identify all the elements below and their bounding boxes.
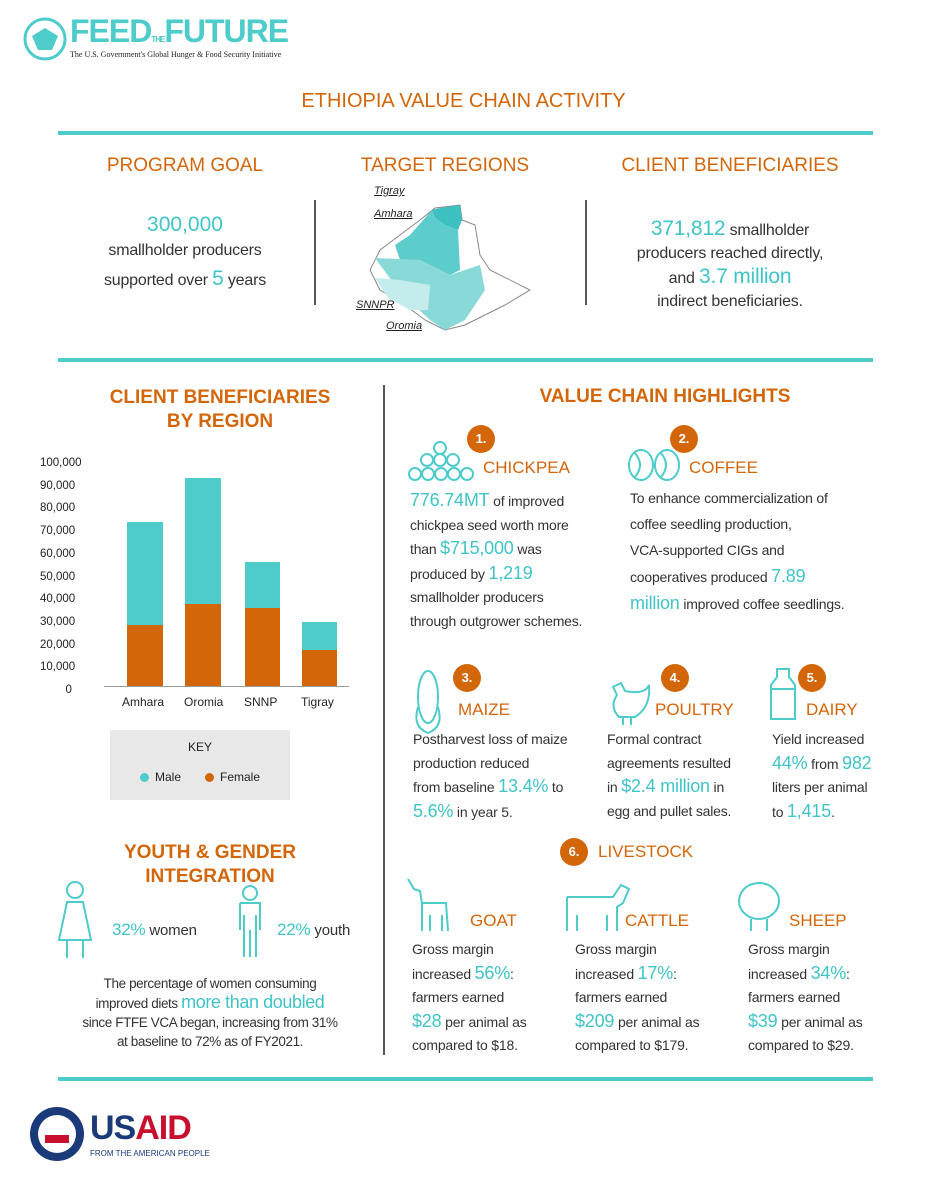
panel: chickpea: 776.74MT of improved	[410, 490, 564, 510]
legend key: Female	[220, 770, 260, 784]
bar chart: Amhara	[122, 695, 164, 709]
panel: goat: compared to $18.	[412, 1037, 518, 1053]
panel: coffee: COFFEE	[689, 458, 758, 477]
text: 22% youth	[277, 920, 350, 939]
panel: goat: farmers earned	[412, 989, 504, 1005]
panel: client beneficiaries: CLIENT BENEFICIARIES	[621, 155, 839, 176]
panel: coffee: 2.	[679, 431, 689, 446]
panel: coffee: VCA-supported CIGs and	[630, 542, 784, 558]
bar chart: SNNP	[244, 695, 277, 709]
legend key: Male	[155, 770, 181, 784]
panel: chickpea: than $715,000 was	[410, 538, 542, 558]
panel: chickpea	[408, 425, 582, 629]
panel: goat: GOAT	[470, 911, 517, 930]
heading: client beneficiaries by region: CLIENT BENEFICIARIES	[110, 387, 330, 408]
bar chart: 90,000	[40, 480, 75, 492]
heading: value chain highlights: VALUE CHAIN HIGHLIGHTS	[540, 386, 790, 407]
panel: poultry: in $2.4 million in	[607, 776, 724, 796]
heading: livestock: LIVESTOCK	[598, 842, 693, 861]
panel: coffee: To enhance commercialization of	[630, 490, 828, 506]
bar chart: Tigray	[301, 695, 334, 709]
bar chart: Oromia	[184, 695, 223, 709]
panel: coffee: million improved coffee seedlings.	[630, 593, 844, 613]
bar chart: 30,000	[40, 616, 75, 628]
bar chart: 50,000	[40, 571, 75, 583]
panel: chickpea: 1.	[476, 431, 486, 446]
heading: youth & gender: YOUTH & GENDER	[124, 842, 296, 863]
legend key	[110, 730, 290, 800]
icon: woman	[58, 881, 92, 958]
panel: cattle: farmers earned	[575, 989, 667, 1005]
panel: goat: Gross margin	[412, 941, 494, 957]
panel: goat: increased 56%:	[412, 962, 514, 982]
logo: feed the future: The U.S. Government's Global Hunger & Food Security Initiative	[70, 50, 281, 59]
text: diets: since FTFE VCA began, increasing from 31%	[82, 1015, 338, 1030]
panel: program goal: PROGRAM GOAL	[107, 155, 263, 176]
bar chart: 20,000	[40, 639, 75, 651]
panel: dairy: to 1,415.	[772, 800, 835, 820]
panel: program goal: 300,000	[147, 213, 223, 236]
heading: client beneficiaries by region: BY REGION	[167, 411, 273, 432]
panel: sheep: Gross margin	[748, 941, 830, 957]
text: diets	[82, 976, 338, 1049]
logo: usaid: FROM THE AMERICAN PEOPLE	[90, 1149, 210, 1158]
title: ETHIOPIA VALUE CHAIN ACTIVITY	[301, 90, 626, 112]
panel: target regions map	[356, 155, 531, 332]
icon: youth	[239, 885, 261, 957]
panel: dairy	[770, 664, 871, 820]
panel: client beneficiaries: indirect beneficiaries.	[657, 293, 803, 310]
panel: maize: Postharvest loss of maize	[413, 731, 568, 747]
panel: maize: 5.6% in year 5.	[413, 800, 513, 820]
panel: goat: $28 per animal as	[412, 1010, 527, 1030]
heading: youth & gender	[124, 842, 296, 887]
panel: chickpea: chickpea seed worth more	[410, 516, 569, 532]
bar chart: 60,000	[40, 548, 75, 560]
panel: chickpea: through outgrower schemes.	[410, 612, 582, 628]
heading: livestock: 6.	[569, 844, 579, 859]
panel: maize: MAIZE	[458, 700, 510, 719]
panel: poultry: POULTRY	[655, 700, 734, 719]
panel: target regions map: SNNPR	[356, 299, 395, 311]
logo: usaid: USAID	[90, 1109, 191, 1147]
text: 32% women	[112, 920, 197, 939]
panel: chickpea: CHICKPEA	[483, 458, 570, 477]
panel: cattle: $209 per animal as	[575, 1010, 699, 1030]
panel: dairy: 5.	[807, 670, 817, 685]
text: diets: at baseline to 72% as of FY2021.	[117, 1034, 303, 1049]
panel: sheep: $39 per animal as	[748, 1010, 863, 1030]
panel: dairy: Yield increased	[772, 731, 864, 747]
panel: maize	[413, 664, 568, 820]
panel: sheep: compared to $29.	[748, 1037, 854, 1053]
logo: feed the future	[24, 13, 288, 60]
panel: chickpea: produced by 1,219	[410, 562, 533, 582]
panel: program goal: smallholder producers	[108, 242, 262, 259]
panel: chickpea: smallholder producers	[410, 589, 544, 605]
panel: client beneficiaries: producers reached directly,	[637, 245, 823, 262]
panel: client beneficiaries	[621, 155, 839, 310]
panel: client beneficiaries: 371,812 smallholder	[651, 217, 809, 240]
bar chart: 0	[66, 684, 72, 696]
logo: usaid	[30, 1107, 210, 1161]
panel: maize: production reduced	[413, 754, 529, 770]
panel: coffee: coffee seedling production,	[630, 516, 792, 532]
legend key: KEY	[188, 740, 212, 754]
panel: poultry: 4.	[670, 670, 680, 685]
bar chart: 40,000	[40, 593, 75, 605]
panel: maize: 3.	[462, 670, 472, 685]
panel: poultry: egg and pullet sales.	[607, 802, 731, 818]
panel: cattle: compared to $179.	[575, 1037, 688, 1053]
panel: program goal: supported over 5 years	[104, 267, 266, 290]
text: diets: improved diets more than doubled	[96, 992, 324, 1012]
bar chart: 100,000	[40, 457, 82, 469]
panel: coffee	[628, 425, 844, 613]
panel: maize: from baseline 13.4% to	[413, 776, 563, 796]
panel: poultry	[607, 664, 734, 819]
panel: cattle: Gross margin	[575, 941, 657, 957]
bar chart: 70,000	[40, 525, 75, 537]
panel: poultry: Formal contract	[607, 731, 701, 747]
panel: target regions map: Oromia	[386, 320, 422, 332]
bar chart: 80,000	[40, 502, 75, 514]
panel: target regions map: Tigray	[374, 185, 404, 197]
heading: livestock	[560, 838, 693, 866]
bar chart: 10,000	[40, 661, 75, 673]
panel: poultry: agreements resulted	[607, 754, 731, 770]
panel: cattle: increased 17%:	[575, 962, 677, 982]
logo: feed the future: FEEDTHEFUTURE	[70, 13, 288, 49]
panel: program goal	[104, 155, 266, 290]
panel: target regions map: Amhara	[374, 208, 413, 220]
panel: dairy: liters per animal	[772, 779, 867, 795]
panel: goat	[407, 878, 527, 1053]
panel: cattle: CATTLE	[625, 911, 689, 930]
panel: dairy: DAIRY	[806, 700, 858, 719]
panel: sheep: increased 34%:	[748, 962, 850, 982]
panel: dairy: 44% from 982	[772, 752, 871, 772]
text: diets: The percentage of women consuming	[104, 976, 316, 991]
heading: client beneficiaries by region	[110, 387, 330, 432]
panel: sheep: farmers earned	[748, 989, 840, 1005]
heading: youth & gender: INTEGRATION	[145, 866, 275, 887]
panel: coffee: cooperatives produced 7.89	[630, 566, 805, 586]
panel: sheep: SHEEP	[789, 911, 847, 930]
panel: client beneficiaries: and 3.7 million	[669, 265, 791, 288]
panel: sheep	[738, 882, 863, 1053]
bar chart	[40, 457, 349, 709]
panel: cattle	[566, 884, 700, 1053]
panel: target regions map: TARGET REGIONS	[361, 155, 529, 176]
